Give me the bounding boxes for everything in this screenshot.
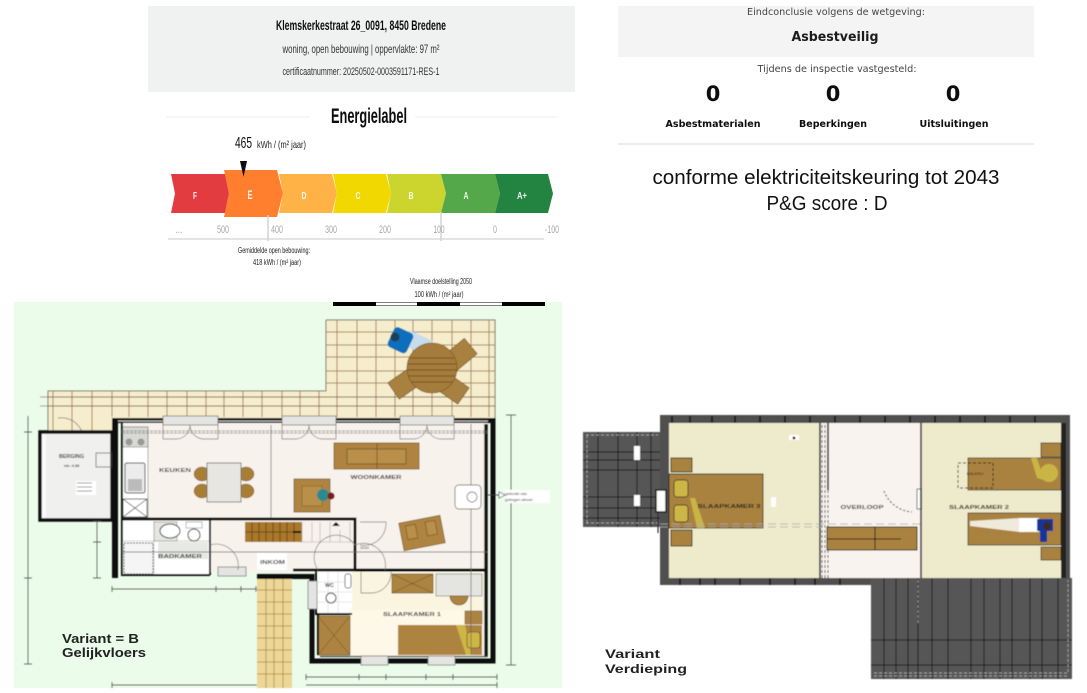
score value: kWh / (m² jaar): [257, 139, 306, 151]
conclusion box: [618, 6, 1034, 57]
scale axis: 300: [325, 224, 337, 236]
average note: [238, 246, 310, 267]
left roof: [583, 432, 661, 527]
energy scale arrows: D: [302, 191, 306, 202]
entrance INKOM: 3034: [360, 545, 370, 550]
dormer window: [656, 490, 666, 533]
target scale bar: [333, 302, 545, 306]
bedroom SLAAPKAMER 1: [318, 572, 487, 656]
variant caption upper floor: [605, 649, 687, 676]
room OVERLOOP: [821, 423, 922, 578]
inspection caption: Tijdens de inspectie vastgesteld:: [757, 64, 916, 75]
certificate header: [148, 6, 575, 92]
ridge line: [660, 524, 921, 527]
inspection counts: Uitsluitingen: [920, 119, 988, 130]
inspection counts: Asbestmaterialen: [666, 119, 760, 130]
scale axis: 100: [434, 224, 444, 236]
entrance INKOM: [257, 545, 370, 570]
armchair with person: [294, 479, 335, 512]
WC: WC: [325, 583, 334, 589]
entrance INKOM: INKOM: [260, 560, 285, 566]
scale axis: 0: [493, 224, 497, 236]
energy scale arrows: B: [408, 191, 414, 202]
dimension lines: [24, 415, 516, 688]
room SLAAPKAMER 2: SLAAPKAMER 2: [949, 505, 1009, 511]
living floor: [122, 422, 487, 570]
inspection counts: [666, 82, 988, 130]
windows and doors: [122, 416, 487, 665]
certificate header: Klemskerkestraat 26_0091, 8450 Bredene: [276, 17, 446, 33]
text block: electrical and P&G: [652, 167, 1000, 215]
stairs: [245, 522, 352, 542]
target note: Vlaamse doelstelling 2050: [410, 277, 472, 286]
terrace table and chairs: [388, 338, 477, 404]
scale axis: 400: [271, 224, 283, 236]
scale axis: 200: [379, 224, 391, 236]
heading: Energielabel: Energielabel: [331, 105, 407, 128]
target note: [410, 277, 472, 299]
score value: 465: [235, 135, 252, 152]
WC: [318, 572, 352, 613]
floor plan: upper floor: [583, 415, 1072, 679]
energy scale arrows: [171, 170, 553, 217]
inspection counts: 0: [706, 82, 720, 106]
target note: 100 kWh / (m² jaar): [414, 290, 464, 299]
energy scale arrows: C: [356, 191, 360, 202]
score value: [235, 135, 306, 152]
room SLAAPKAMER 3: SLAAPKAMER 3: [698, 504, 760, 510]
storage room BERGING: niv -4.08: [64, 464, 79, 468]
variant caption ground floor: Variant = B: [62, 631, 139, 646]
wall note: [487, 490, 550, 503]
scale axis: 500: [217, 224, 229, 236]
scale axis: ...: [176, 224, 182, 236]
energy scale arrows: E: [248, 188, 252, 202]
conclusion box: Eindconclusie volgens de wetgeving:: [747, 7, 925, 18]
score marker: [240, 161, 247, 177]
panel: energy certificate: [148, 6, 575, 299]
text block: electrical and P&G: P&G score : D: [766, 193, 888, 215]
conclusion box: Asbestveilig: [792, 30, 878, 45]
scale axis: [168, 212, 559, 241]
lounge chair: [399, 515, 445, 551]
sofa: [334, 443, 419, 469]
upper walls: [660, 415, 1070, 585]
variant caption upper floor: Variant: [605, 649, 660, 661]
dining table: [194, 463, 254, 502]
bathroom BADKAMER: BADKAMER: [158, 554, 202, 560]
terrace: [40, 320, 495, 432]
inspection counts: Beperkingen: [799, 119, 867, 130]
room OVERLOOP: OVERLOOP: [840, 505, 884, 511]
variant caption ground floor: Gelijkvloers: [62, 645, 146, 660]
bedroom SLAAPKAMER 1: SLAAPKAMER 1: [383, 612, 441, 618]
energy scale arrows: F: [193, 191, 197, 202]
certificate header: woning, open bebouwing | oppervlakte: 97 m²: [282, 42, 440, 56]
WOONKAMER and KEUKEN labels: WOONKAMER: [350, 475, 402, 481]
wall note: gebruikt van: [505, 491, 527, 496]
storage room BERGING: [40, 432, 112, 520]
garden path: [257, 579, 292, 688]
room SLAAPKAMER 2: [922, 423, 1061, 578]
average note: Gemiddelde open bebouwing:: [238, 246, 310, 255]
washbasin at wall: [455, 485, 481, 509]
wall note: gebogen afvoer: [505, 497, 533, 502]
right roof: [871, 578, 1072, 679]
house walls: [112, 418, 493, 661]
kitchen counter: [122, 427, 148, 518]
panel: asbestos conclusion: [618, 6, 1034, 144]
WOONKAMER and KEUKEN labels: [159, 468, 402, 481]
storage room BERGING: BERGING: [59, 454, 84, 460]
floor plan: ground floor: [14, 302, 562, 688]
certificate header: certificaatnummer: 20250502-0003591171-RES-1: [282, 66, 440, 78]
average note: 418 kWh / (m² jaar): [253, 258, 301, 267]
energy scale arrows: A+: [517, 191, 527, 202]
room SLAAPKAMER 2: GALERIJ: [967, 471, 983, 476]
bathroom BADKAMER: [122, 521, 210, 575]
partition walls: [820, 423, 921, 578]
scale axis: -100: [545, 224, 559, 236]
variant caption upper floor: Verdieping: [605, 664, 687, 676]
person on terrace: [386, 326, 433, 356]
inspection counts: 0: [826, 82, 840, 106]
inspection counts: 0: [946, 82, 960, 106]
energy scale arrows: A: [464, 191, 468, 202]
WOONKAMER and KEUKEN labels: KEUKEN: [159, 468, 191, 474]
text block: electrical and P&G: conforme elektriciteitskeuring tot 2043: [652, 167, 1000, 189]
room SLAAPKAMER 3: [669, 423, 821, 578]
variant caption ground floor: [62, 631, 146, 660]
